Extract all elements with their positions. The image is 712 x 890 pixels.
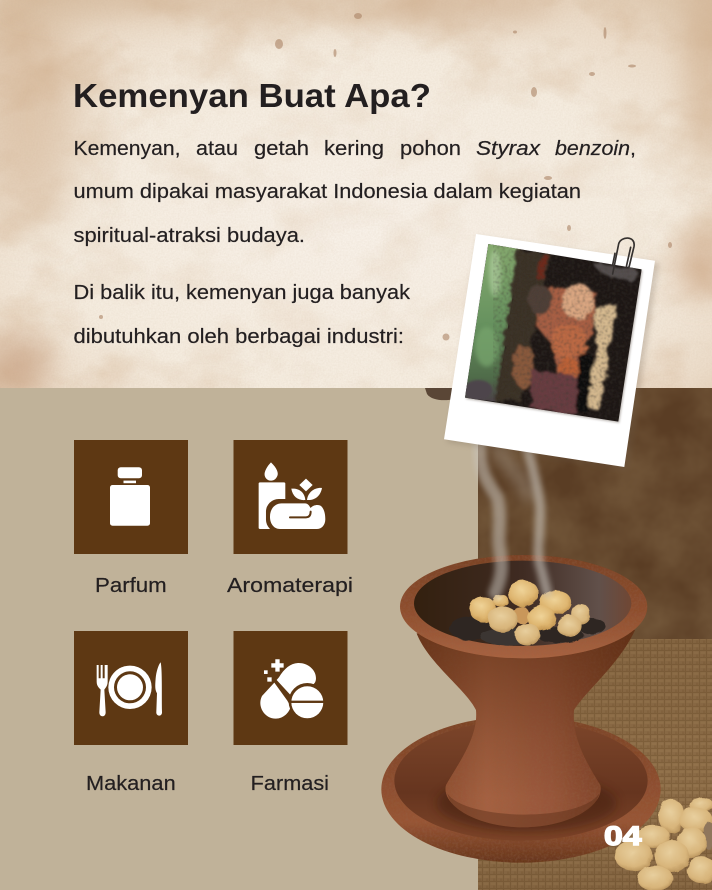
panel: aged paper background: [0, 0, 712, 395]
polaroid shadow: [447, 237, 659, 470]
heading: Kemenyan Buat Apa?: [73, 77, 431, 114]
smoke wisps: [480, 440, 547, 593]
resin pieces in bowl: [469, 580, 590, 646]
text block: intro paragraph: kering: [324, 137, 384, 160]
text block: intro paragraph: spiritual-atraksi budaya.: [74, 224, 305, 247]
text block: intro paragraph: [74, 137, 636, 247]
ash: [449, 616, 606, 645]
photo: resin on tree trunk: [460, 240, 647, 427]
icon: fork, plate and knife: [97, 662, 162, 716]
panel: tan lower background: [0, 388, 478, 890]
text block: industries intro: Di balik itu, kemenyan juga banyak: [74, 281, 411, 304]
text block: intro paragraph: umum dipakai masyarakat Indonesia dalam kegiatan: [74, 180, 581, 203]
text block: industries intro: dibutuhkan oleh berbagai industri:: [74, 325, 404, 348]
burner body: [417, 630, 635, 827]
loose resin pile: [615, 798, 712, 890]
polaroid frame: [444, 234, 655, 467]
label: Makanan: Makanan: [86, 772, 176, 795]
label: Aromaterapi: Aromaterapi: [227, 574, 353, 597]
text block: intro paragraph: Kemenyan,: [74, 137, 180, 160]
icon card: Aromaterapi: [234, 440, 348, 554]
polaroid photo: [444, 234, 659, 470]
text block: industries intro: [74, 281, 411, 348]
icon: pills and sparkle: [260, 659, 326, 720]
page number: 04: [604, 821, 642, 851]
burner rim: [400, 555, 647, 658]
icon: perfume bottle: [110, 467, 150, 526]
label: Farmasi: Farmasi: [251, 772, 329, 795]
text block: intro paragraph: Styrax: [476, 137, 541, 160]
burner bowl interior: [414, 561, 631, 646]
panel: dark brown backdrop: [478, 388, 712, 640]
photo: clay incense burner with resin: [381, 555, 712, 890]
icon: candle, towel and leaves: [259, 462, 328, 532]
icon card: Makanan: [74, 631, 188, 745]
dark shape behind polaroid: [425, 388, 455, 400]
text block: intro paragraph: atau: [196, 137, 238, 160]
panel: burlap surface: [478, 639, 712, 890]
icon card: Farmasi: [234, 631, 348, 745]
text block: intro paragraph: benzoin,: [555, 137, 636, 160]
text block: intro paragraph: getah: [254, 137, 309, 160]
icon card: Parfum: [74, 440, 188, 554]
icon: paperclip: [613, 238, 634, 274]
saucer: [381, 716, 661, 863]
text block: intro paragraph: pohon: [400, 137, 461, 160]
label: Parfum: Parfum: [95, 574, 167, 597]
